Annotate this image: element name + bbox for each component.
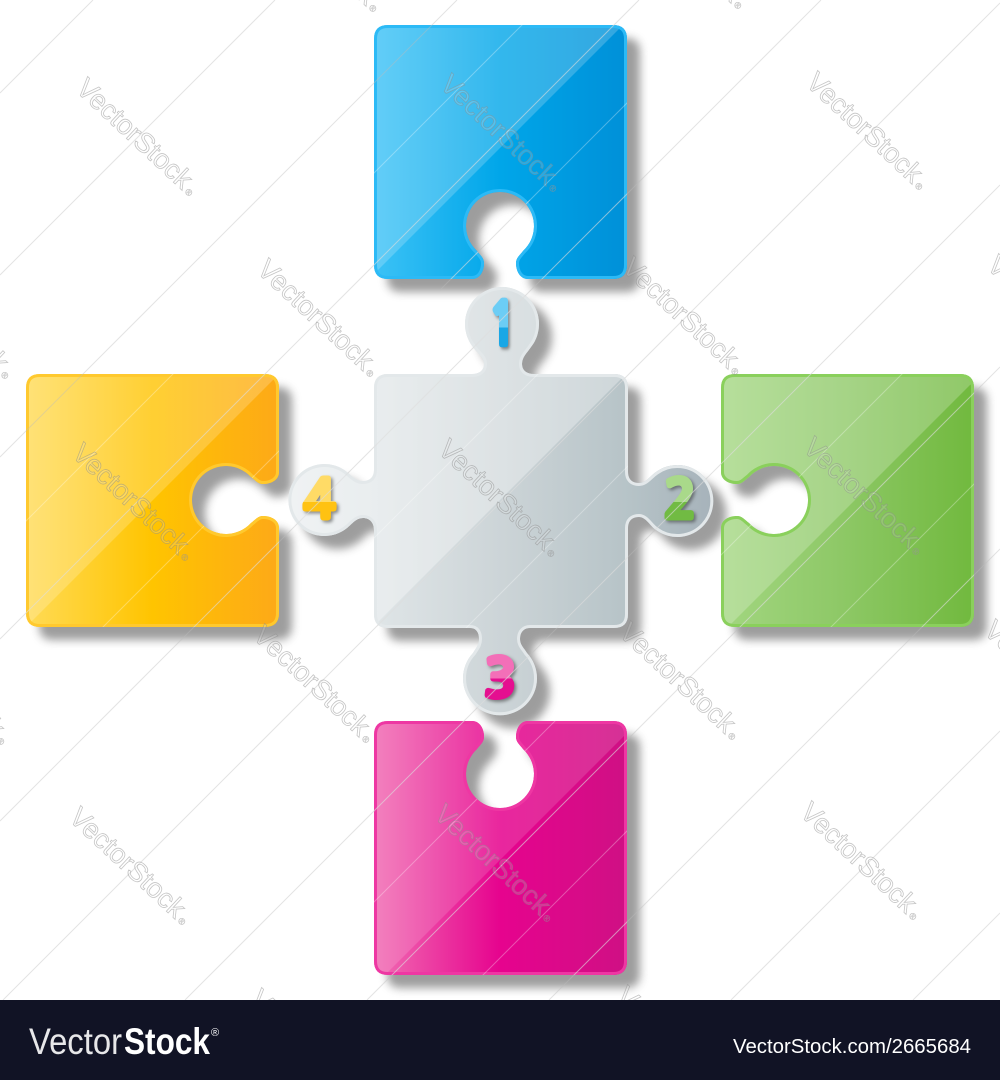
- footer image id: VectorStock.com/2665684: [733, 1036, 971, 1058]
- footer logo: Vector: [29, 1021, 122, 1062]
- VectorStock watermarks: VectorStock®: [67, 437, 202, 567]
- VectorStock watermarks: VectorStock®: [433, 433, 568, 563]
- puzzle piece: green, right: [721, 374, 981, 634]
- VectorStock watermarks: VectorStock®: [64, 801, 199, 931]
- puzzle piece: blue, top: [374, 25, 627, 279]
- footer logo: Stock: [124, 1021, 210, 1062]
- central grey connector piece: [280, 280, 720, 720]
- VectorStock watermarks: VectorStock®: [71, 72, 206, 202]
- VectorStock watermarks: VectorStock®: [248, 619, 383, 749]
- footer logo: [29, 1021, 219, 1062]
- VectorStock watermarks: VectorStock®: [795, 796, 930, 926]
- number 2: 2: [664, 473, 696, 526]
- VectorStock watermarks: VectorStock®: [798, 431, 933, 561]
- number 1: 1: [489, 295, 516, 353]
- puzzle piece: yellow, left: [26, 374, 279, 627]
- VectorStock watermarks: VectorStock®: [801, 66, 936, 196]
- VectorStock watermarks: VectorStock®: [614, 616, 749, 746]
- number 3: 3: [484, 652, 516, 705]
- VectorStock watermarks: VectorStock®: [617, 251, 752, 381]
- VectorStock watermarks: VectorStock®: [429, 798, 564, 928]
- number 4: 4: [303, 473, 336, 526]
- VectorStock watermarks: VectorStock®: [435, 68, 570, 198]
- footer bar: [0, 1000, 1000, 1080]
- puzzle piece: magenta, bottom: [374, 721, 639, 986]
- footer logo: ®: [211, 1027, 219, 1039]
- VectorStock watermarks: VectorStock®: [252, 253, 387, 383]
